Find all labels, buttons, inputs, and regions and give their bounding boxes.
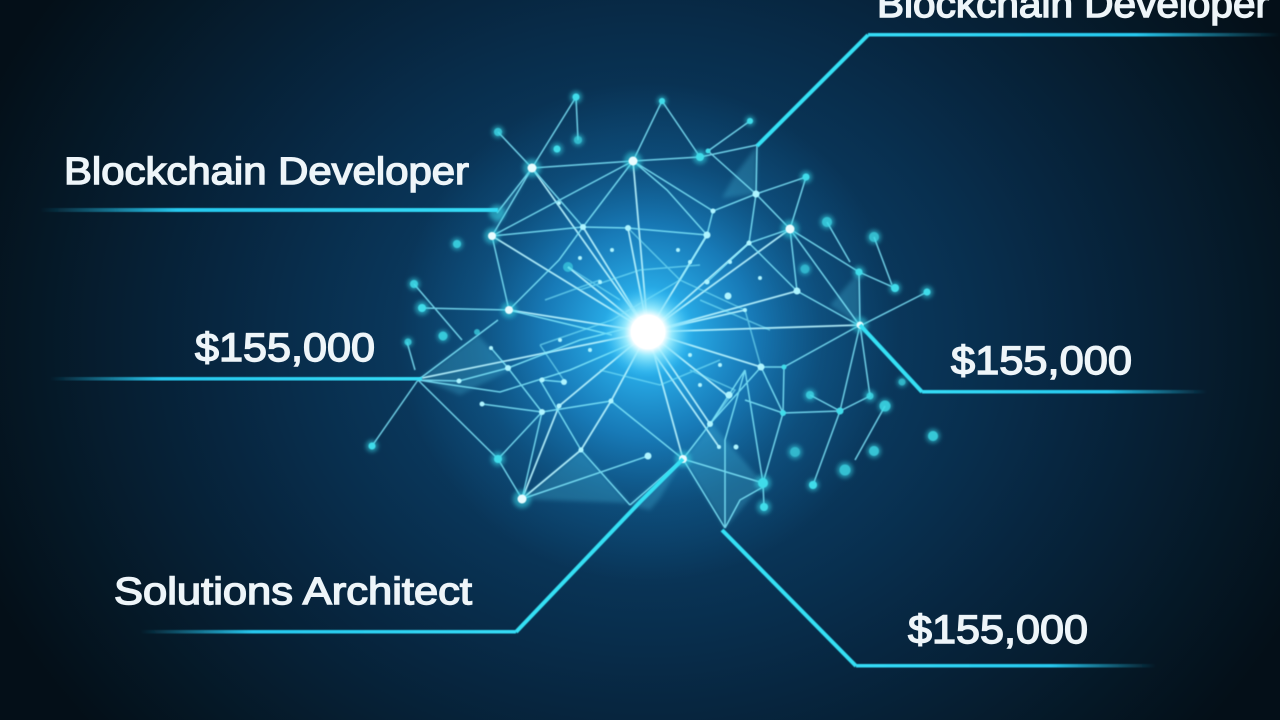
callout: lower left title bbox=[114, 459, 683, 634]
connector line bbox=[140, 459, 683, 634]
callout: right salary bbox=[860, 325, 1207, 394]
connector line bbox=[860, 325, 1207, 394]
network diagram bbox=[366, 91, 940, 528]
label: $155,000 bbox=[908, 608, 1088, 652]
callout: upper left title bbox=[40, 151, 498, 212]
label: Blockchain Developer bbox=[64, 151, 469, 193]
connector line bbox=[757, 33, 1280, 146]
connector line bbox=[722, 530, 1156, 668]
inner nodes bbox=[456, 190, 800, 460]
connector line bbox=[40, 208, 498, 212]
bright core bbox=[602, 286, 694, 378]
translucent facets bbox=[420, 146, 860, 528]
label: $155,000 bbox=[951, 339, 1132, 383]
node halos bbox=[366, 91, 940, 514]
network nodes bbox=[368, 94, 938, 511]
callout: left salary bbox=[50, 326, 422, 380]
label: $155,000 bbox=[195, 326, 375, 370]
connector line bbox=[50, 377, 422, 380]
bright nodes bbox=[488, 156, 864, 504]
callout: lower right salary bbox=[722, 530, 1156, 668]
web links bbox=[372, 97, 927, 528]
callout: top right title bbox=[757, 0, 1280, 146]
central glow bbox=[398, 82, 898, 582]
label: Solutions Architect bbox=[114, 571, 473, 613]
spokes from the core bbox=[422, 161, 860, 499]
